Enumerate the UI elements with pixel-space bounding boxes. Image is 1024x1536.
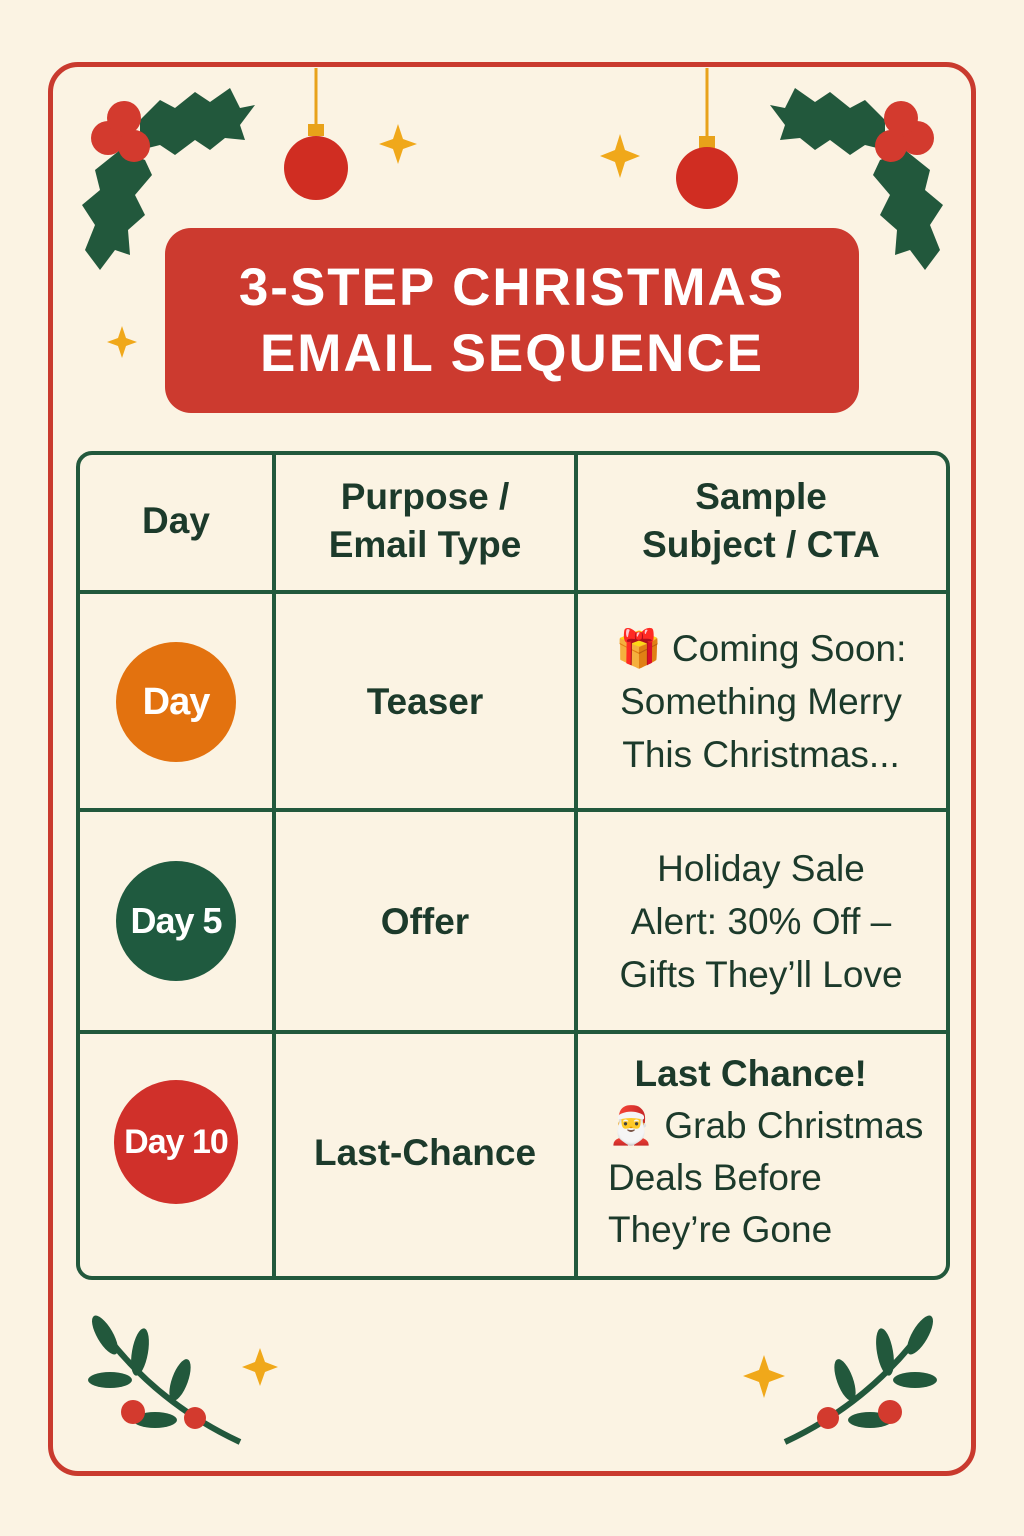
title bbox=[165, 228, 859, 413]
badge: day 10 bbox=[114, 1080, 238, 1204]
cell: teaser subject bbox=[616, 628, 906, 774]
title: 3-STEP CHRISTMAS bbox=[239, 258, 785, 316]
icon: holly right bbox=[770, 88, 943, 270]
cell: teaser subject: 🎁 Coming Soon: bbox=[616, 628, 906, 668]
cell: last chance: Last-Chance bbox=[314, 1132, 536, 1172]
cell: offer subject: Gifts They’ll Love bbox=[619, 954, 903, 994]
cell: last chance subject bbox=[608, 1053, 923, 1250]
table bbox=[76, 451, 950, 1280]
badge: day bbox=[116, 642, 236, 762]
cell: teaser subject: This Christmas... bbox=[622, 734, 900, 774]
icon: sparkles bbox=[107, 124, 785, 1398]
icon: branch left bbox=[87, 1312, 240, 1442]
header: day: Day bbox=[142, 500, 210, 541]
badge: day 10: Day 10 bbox=[124, 1122, 228, 1160]
icon: holly left bbox=[82, 88, 255, 270]
title: EMAIL SEQUENCE bbox=[260, 324, 764, 382]
cell: teaser: Teaser bbox=[367, 680, 483, 722]
cell: offer subject: Holiday Sale bbox=[657, 848, 865, 888]
badge: day 5 bbox=[116, 861, 236, 981]
icon: branch right bbox=[785, 1312, 938, 1442]
header: sample: Sample bbox=[695, 476, 827, 516]
header: purpose bbox=[329, 476, 521, 564]
cell: offer subject bbox=[619, 848, 903, 994]
header: purpose: Purpose / bbox=[341, 476, 509, 516]
cell: last chance subject: Last Chance! bbox=[635, 1053, 867, 1094]
cell: teaser subject: Something Merry bbox=[620, 680, 902, 722]
cell: last chance subject: Deals Before bbox=[608, 1157, 822, 1198]
cell: last chance subject: 🎅 Grab Christmas bbox=[608, 1105, 923, 1146]
cell: offer: Offer bbox=[381, 900, 469, 942]
header: sample bbox=[642, 476, 880, 564]
cell: last chance subject: They’re Gone bbox=[608, 1209, 832, 1250]
icon: ornaments bbox=[284, 68, 738, 209]
cell: offer subject: Alert: 30% Off – bbox=[631, 900, 891, 942]
badge: day 5: Day 5 bbox=[130, 900, 222, 941]
badge: day: Day bbox=[143, 680, 209, 722]
header: purpose: Email Type bbox=[329, 524, 521, 564]
header: sample: Subject / CTA bbox=[642, 524, 880, 564]
